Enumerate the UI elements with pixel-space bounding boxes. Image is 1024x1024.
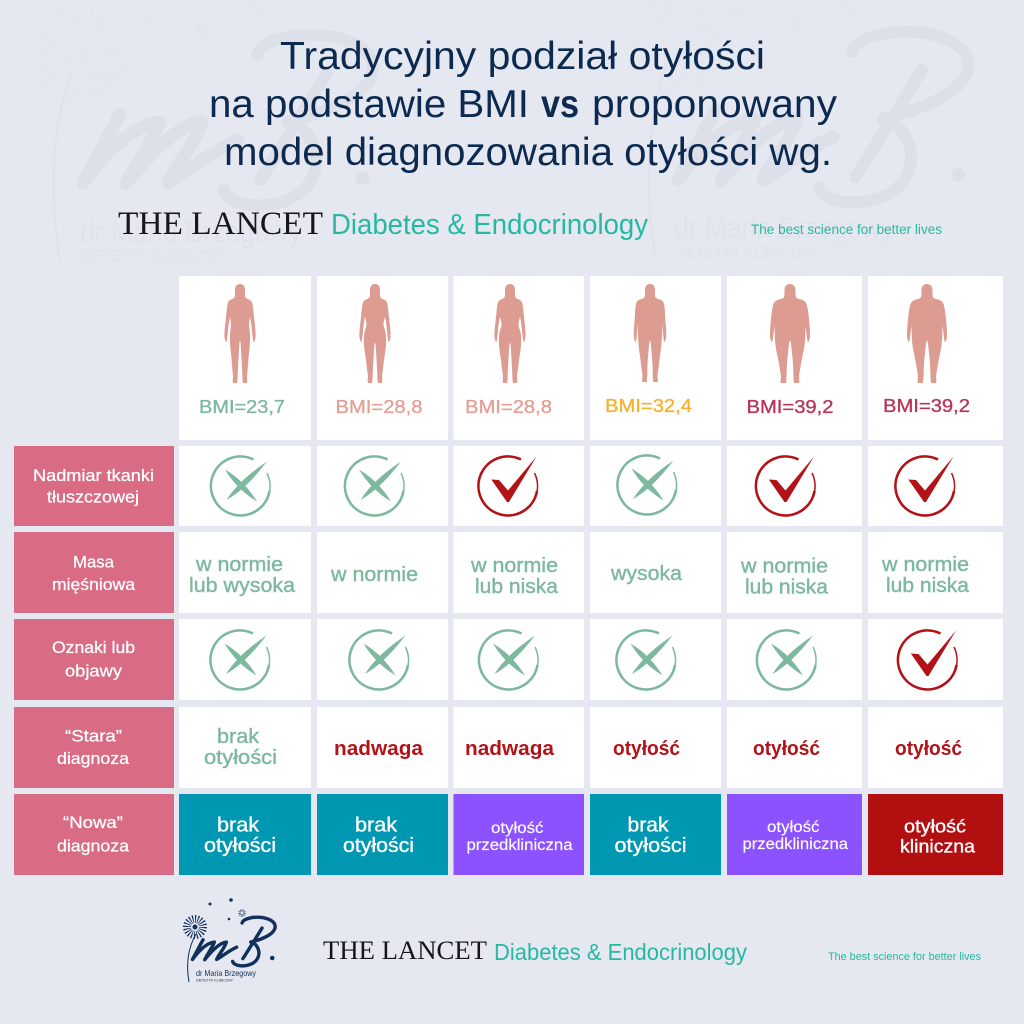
row label: Masa — [73, 554, 115, 572]
column 5 header — [727, 276, 862, 440]
panel: body types and BMI — [179, 276, 1003, 440]
cell: no obesity — [590, 794, 721, 875]
cell: obesity: otyłość — [895, 738, 962, 760]
cell: overweight: nadwaga — [465, 738, 555, 760]
cell: obesity — [590, 707, 721, 788]
row label — [14, 707, 174, 788]
column 2 header: BMI=28,8 — [336, 396, 422, 417]
icon: cross — [616, 630, 676, 689]
journal logo: bottom: Diabetes & Endocrinology — [494, 939, 747, 965]
cell: preclinical obesity — [454, 794, 584, 875]
cell: no obesity: otyłości — [614, 835, 686, 857]
watermark: right logo — [631, 0, 968, 262]
row label — [14, 794, 174, 875]
icon: check — [756, 456, 815, 515]
title: model diagnozowania otyłości wg. — [224, 131, 832, 174]
cell: in norm or low — [727, 532, 862, 613]
cell: in norm: w normie — [330, 564, 418, 586]
row label — [14, 619, 174, 700]
column 2 header — [317, 276, 448, 440]
icon: cross — [345, 456, 404, 515]
cell: in norm or low — [868, 532, 1003, 613]
cell: preclinical obesity — [727, 794, 862, 875]
column 6 header — [868, 276, 1003, 440]
row label: Nadmiar tkanki — [33, 467, 154, 485]
row label — [14, 446, 174, 526]
row label: “Nowa” — [63, 814, 123, 832]
cell: in norm or low: w normie — [470, 555, 558, 577]
cell: no obesity — [179, 794, 311, 875]
icon: cross — [349, 630, 409, 689]
cell: preclinical obesity: otyłość — [767, 819, 820, 836]
cell: preclinical obesity: otyłość — [491, 820, 544, 837]
cell: overweight — [317, 707, 448, 788]
row: new diagnosis — [14, 794, 1003, 875]
icon: check — [478, 456, 538, 515]
row label: diagnoza — [57, 838, 130, 856]
column 3 header — [454, 276, 584, 440]
cell: high: wysoka — [610, 563, 683, 585]
cell: in norm — [317, 532, 448, 613]
journal logo: bottom: The best science for better lives — [828, 951, 981, 963]
row: excess fat tissue — [14, 446, 1003, 526]
cell: clinical obesity: kliniczna — [900, 836, 976, 856]
title: vs — [541, 83, 579, 126]
logo: dr Maria Brzegowy: DIETETYK KLINICZNY — [196, 978, 234, 982]
cell: in norm or high: w normie — [195, 554, 283, 576]
cell: high — [590, 532, 721, 613]
cell: in norm or low: lub niska — [745, 576, 829, 598]
watermark: left logo: dr Maria Brzegowy — [80, 214, 302, 249]
row label: objawy — [65, 662, 123, 680]
cell: in norm or low: w normie — [740, 556, 828, 578]
icon: cross — [210, 630, 270, 689]
row label: “Stara” — [65, 728, 122, 746]
row: muscle mass — [14, 532, 1003, 613]
journal logo: top: Diabetes & Endocrinology — [331, 209, 648, 241]
icon: check — [898, 630, 957, 689]
cell: in norm or low — [454, 532, 584, 613]
cell: no obesity: otyłości — [343, 835, 414, 857]
watermark: left logo — [36, 4, 373, 265]
logo: dr Maria Brzegowy — [187, 898, 275, 982]
icon: cross — [757, 630, 816, 689]
cell: obesity — [868, 707, 1003, 788]
logo: dr Maria Brzegowy: dr Maria Brzegowy — [196, 968, 257, 978]
cell: preclinical obesity: przedkliniczna — [742, 836, 848, 853]
column 4 header: BMI=32,4 — [605, 395, 692, 416]
journal logo: top: THE LANCET — [118, 206, 323, 242]
cell: clinical obesity: otyłość — [904, 816, 966, 836]
column 1 header — [179, 276, 311, 440]
cell: in norm or low: w normie — [881, 554, 969, 576]
cell: no obesity: brak — [355, 814, 398, 836]
cell: in norm or high: lub wysoka — [189, 575, 296, 597]
icon: cross — [211, 456, 270, 515]
cell: in norm or low: lub niska — [886, 575, 970, 597]
title: Tradycyjny podział otyłości — [280, 35, 765, 78]
row label: tłuszczowej — [47, 488, 139, 506]
watermark: right logo: DIETETYK KLINICZNY — [673, 245, 817, 262]
watermark: left logo: DIETETYK KLINICZNY — [80, 248, 223, 265]
row: signs or symptoms — [14, 619, 1003, 700]
title: proponowany — [592, 83, 838, 126]
journal logo: top: The best science for better lives — [751, 222, 942, 237]
cell: no obesity: brak — [217, 726, 260, 748]
cell: obesity — [727, 707, 862, 788]
cell: in norm or low: lub niska — [475, 576, 559, 598]
title: na podstawie BMI — [209, 83, 529, 126]
column 4 header — [590, 276, 721, 440]
cell: obesity: otyłość — [613, 738, 680, 760]
journal logo: bottom — [323, 936, 981, 965]
cell: no obesity: otyłości — [204, 835, 276, 857]
column 6 header: BMI=39,2 — [883, 395, 970, 416]
cell: no obesity: brak — [217, 814, 260, 836]
cell: preclinical obesity: przedkliniczna — [466, 837, 573, 854]
icon: check — [895, 456, 955, 515]
watermark: right logo: dr Maria Brzegowy — [674, 210, 894, 245]
cell: overweight: nadwaga — [334, 738, 424, 760]
title — [209, 35, 838, 174]
journal logo: top — [118, 206, 942, 242]
cell: no obesity: brak — [628, 814, 670, 836]
row label: Oznaki lub — [52, 639, 135, 657]
cell: clinical obesity — [868, 794, 1003, 875]
icon: cross — [617, 455, 677, 514]
journal logo: bottom: THE LANCET — [323, 936, 487, 965]
cell: obesity: otyłość — [753, 738, 820, 760]
cell: no obesity — [317, 794, 448, 875]
column 3 header: BMI=28,8 — [465, 396, 552, 417]
column 5 header: BMI=39,2 — [746, 396, 834, 417]
row label: mięśniowa — [52, 576, 136, 594]
cell: in norm or high — [179, 532, 311, 613]
cell: no obesity: otyłości — [204, 747, 277, 769]
cell: overweight — [454, 707, 584, 788]
cell: no obesity — [179, 707, 311, 788]
icon: cross — [479, 630, 538, 689]
row label: diagnoza — [57, 750, 130, 768]
column 1 header: BMI=23,7 — [199, 396, 285, 417]
row: old diagnosis — [14, 707, 1003, 788]
row label — [14, 532, 174, 613]
